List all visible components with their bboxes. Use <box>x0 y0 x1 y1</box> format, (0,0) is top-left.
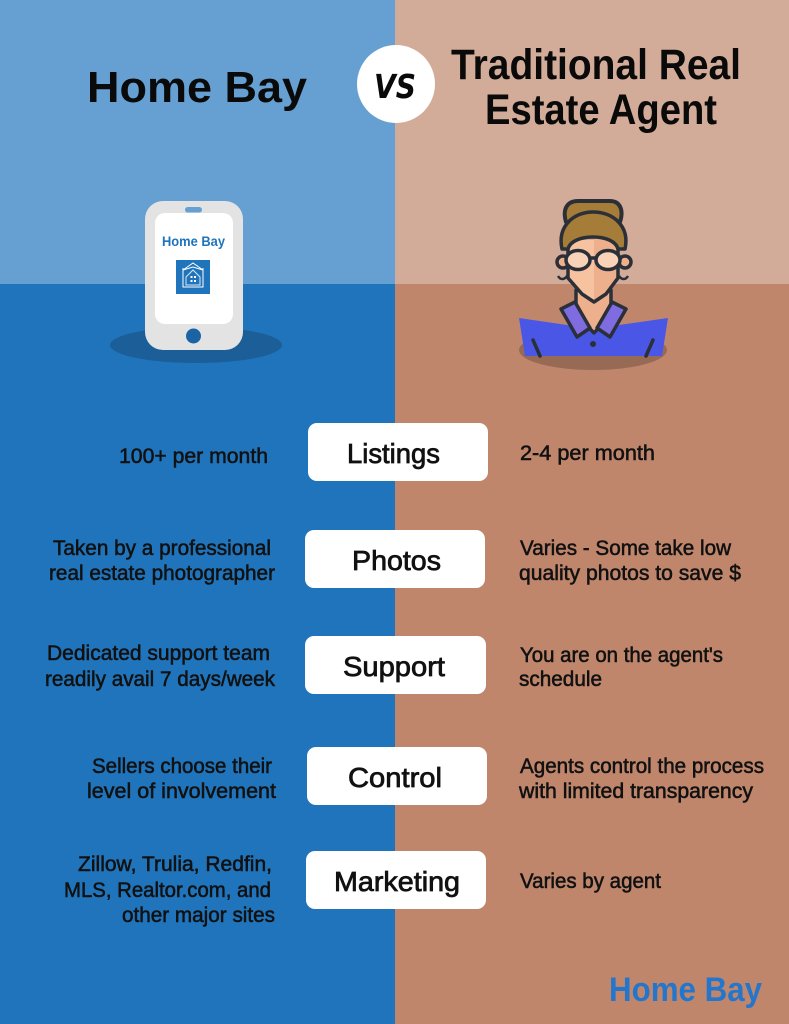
row: Marketing: other major sites <box>122 903 275 927</box>
row: Photos: Photos <box>352 545 441 576</box>
row: Marketing: Varies by agent <box>520 869 661 893</box>
row: Photos <box>49 530 741 588</box>
row: Marketing: Marketing <box>334 866 460 897</box>
title: Traditional Real Estate Agent: Estate Agent <box>485 86 717 134</box>
row: Listings: 100+ per month <box>119 444 268 468</box>
row: Photos: real estate photographer <box>49 561 275 585</box>
row: Support: Support <box>343 651 445 682</box>
title: Traditional Real Estate Agent <box>451 41 741 134</box>
title: Traditional Real Estate Agent: Traditional Real <box>451 41 741 89</box>
row: Control: Agents control the process <box>520 754 764 778</box>
row: Photos: Taken by a professional <box>53 536 271 560</box>
VS badge: VS <box>374 67 416 106</box>
row: Support: schedule <box>519 667 602 691</box>
row: Support: readily avail 7 days/week <box>45 667 275 691</box>
title: Home Bay: Home Bay <box>87 63 308 112</box>
row: Marketing <box>64 851 661 927</box>
VS badge <box>357 45 435 123</box>
logo: Home Bay: Home Bay <box>609 971 762 1009</box>
row: Control: with limited transparency <box>518 779 753 803</box>
row: Support: Dedicated support team <box>47 641 270 665</box>
row: Photos: quality photos to save $ <box>519 561 741 585</box>
row: Listings <box>119 423 655 481</box>
row: Support <box>45 636 723 694</box>
row: Control: level of involvement <box>87 779 276 803</box>
row: Control: Control <box>348 762 442 793</box>
row: Listings: Listings <box>347 438 440 469</box>
icon: agent avatar <box>519 201 668 370</box>
row: Marketing: MLS, Realtor.com, and <box>64 878 271 902</box>
icon: phone: Home Bay <box>162 234 225 249</box>
row: Support: You are on the agent's <box>520 643 723 667</box>
icon: phone <box>110 201 282 363</box>
row: Marketing: Zillow, Trulia, Redfin, <box>78 852 272 876</box>
row: Control: Sellers choose their <box>92 754 272 778</box>
row: Control <box>87 747 764 805</box>
row: Photos: Varies - Some take low <box>520 536 731 560</box>
row: Listings: 2-4 per month <box>520 441 655 465</box>
